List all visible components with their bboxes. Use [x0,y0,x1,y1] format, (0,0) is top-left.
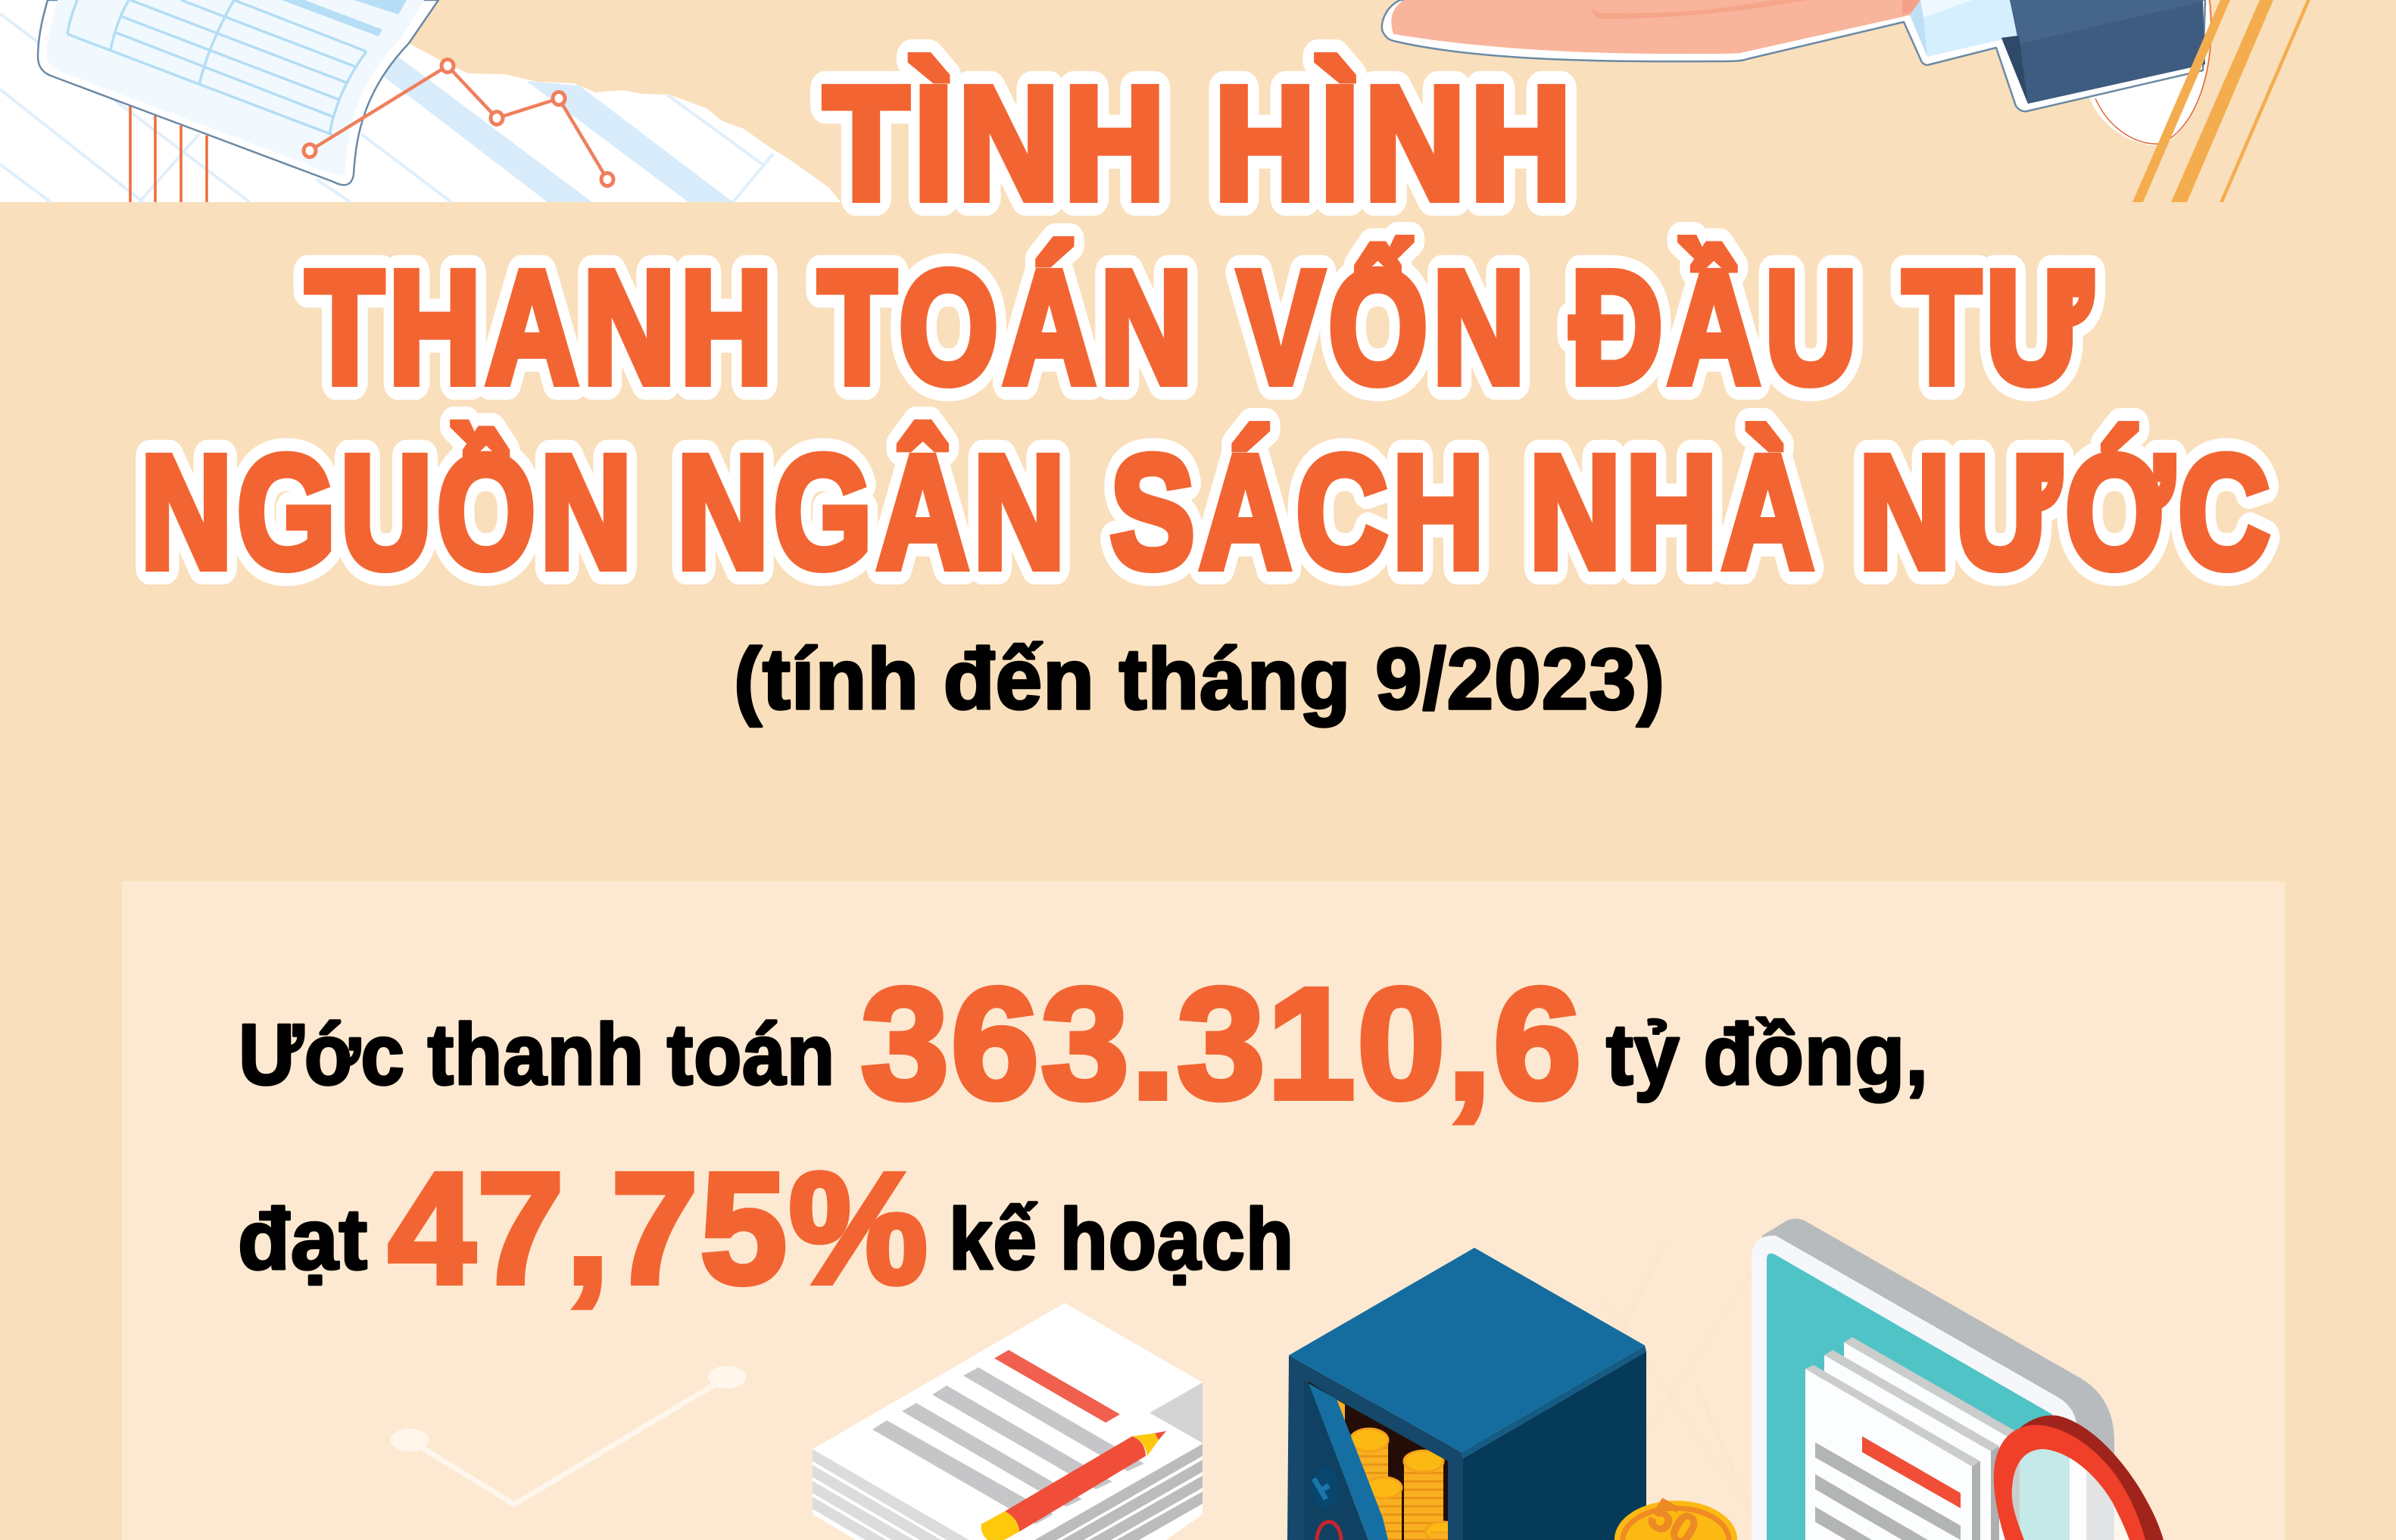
icon: stack of papers and pencil [813,1303,1203,1540]
text: tỷ đồng, [1606,1007,1929,1103]
frame front repeat [1448,1458,1463,1540]
safe top face [1289,1248,1645,1452]
illustration: hand with cuff and sleeve, top right [1382,0,2310,202]
safe door [1304,1380,1368,1540]
icon: open safe with coins [1287,1248,1646,1540]
statement: line 2: 47,75% [388,1141,930,1317]
orange diagonal lines [2132,0,2310,202]
white oval shape [2045,0,2210,145]
skin [1391,0,1920,54]
document sheets [1805,1337,2022,1540]
document sheet [38,0,438,185]
cuff [1910,0,2019,57]
title: TÌNH HÌNH [824,54,1577,232]
safe right side [1463,1351,1646,1540]
safe front frame [1287,1355,1463,1540]
statement: line 1 [239,956,1929,1132]
statement: line 2: đạt [238,1192,368,1288]
line chart [304,59,613,186]
safe interior [1304,1382,1448,1540]
safe door handle [1312,1467,1338,1509]
illustration: document and line chart, top left [0,0,841,202]
tablet back [1752,1218,2114,1540]
safe red wheel [1317,1522,1341,1540]
white outline of hand and cuff [1382,0,2205,111]
top sheet [813,1303,1203,1540]
panel: content [122,881,2285,1540]
torn white paper background [0,0,841,202]
statement: line 1: Ước thanh toán [239,1007,835,1103]
statement: line 1: 363.310,6 [861,956,1583,1132]
paper layers [813,1443,1203,1540]
title [141,54,2275,601]
text: kế hoạch [949,1192,1294,1288]
sleeve [2001,0,2205,104]
coin stacks [1337,1399,1448,1540]
tablet screen [1767,1254,2060,1540]
tablet frame [1752,1236,2077,1540]
icon: coin 50 [1614,1489,1737,1540]
magnifier [1994,1415,2164,1540]
faint background lines [1605,1242,1752,1514]
icon: check line chart [391,1366,746,1504]
icon: tablet with documents and magnifier [1752,1218,2164,1540]
pencil [1005,1436,1146,1532]
